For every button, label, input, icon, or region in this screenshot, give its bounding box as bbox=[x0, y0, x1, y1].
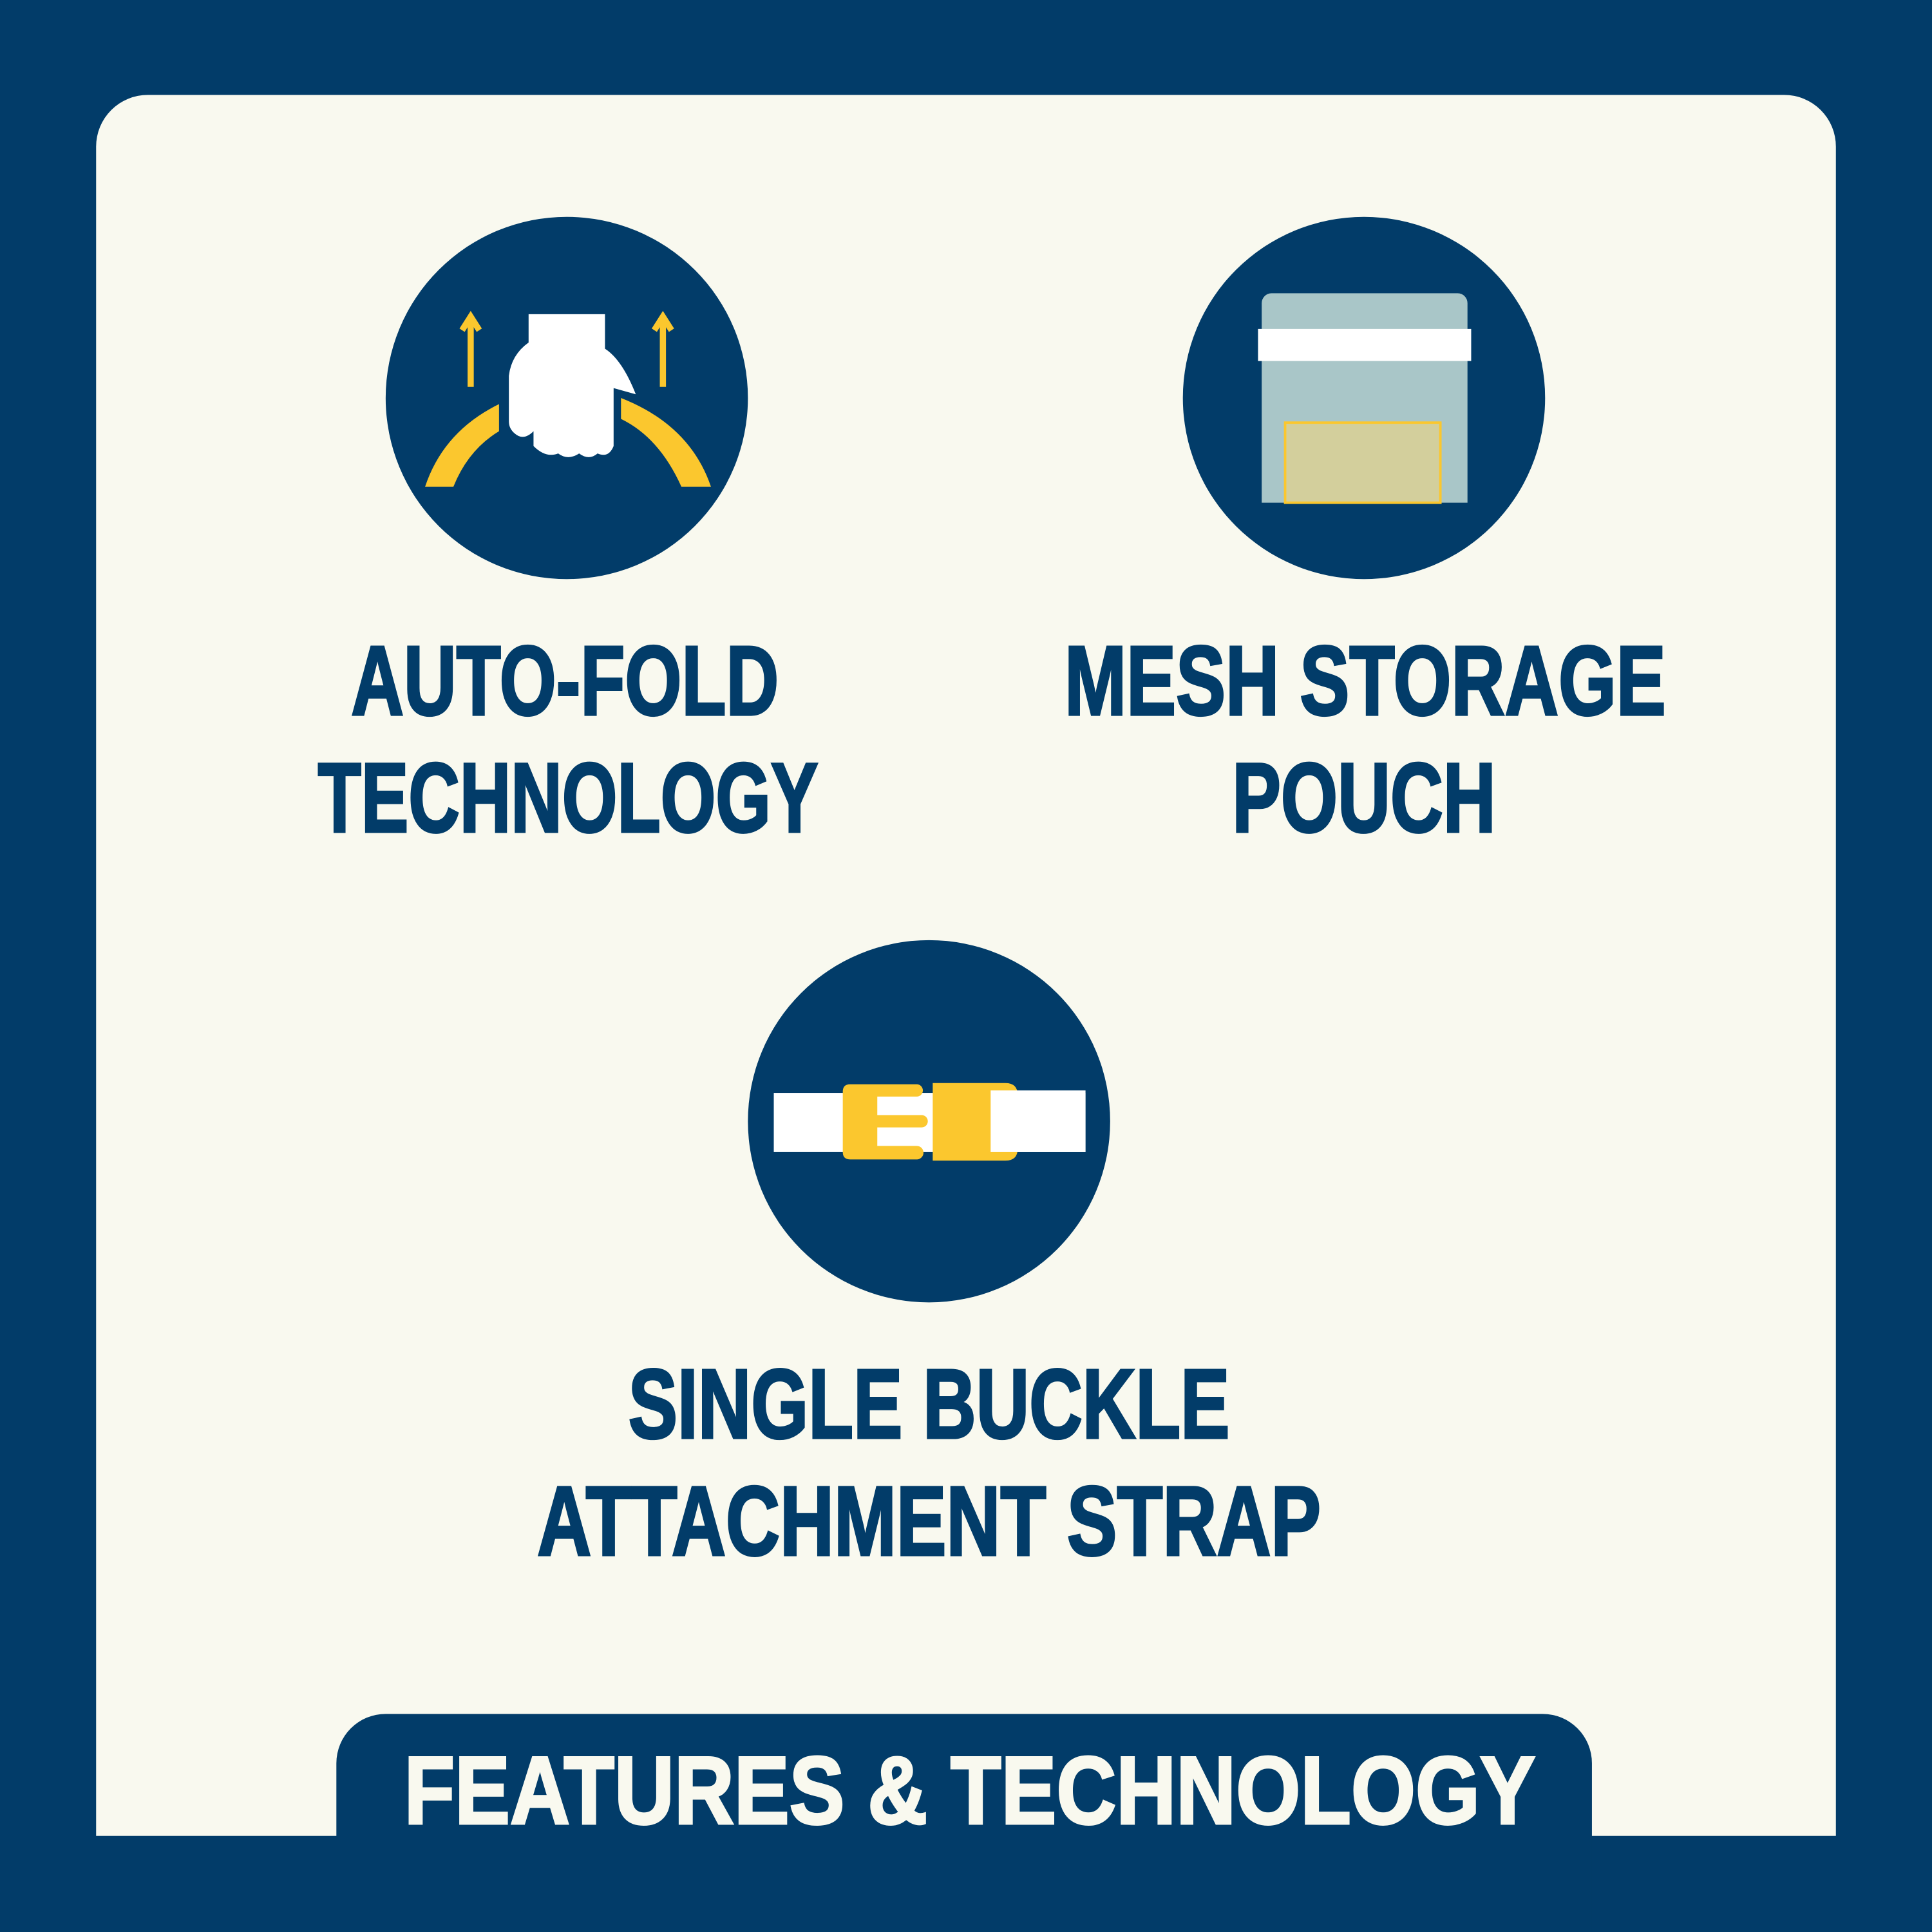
text: feature labels: AUTO-FOLD bbox=[351, 626, 779, 736]
text: feature labels bbox=[318, 626, 1666, 1577]
text: feature labels: ATTACHMENT STRAP bbox=[537, 1466, 1321, 1577]
mesh pocket bbox=[1285, 422, 1441, 503]
banner tab bbox=[336, 1714, 1592, 1932]
text: feature labels: MESH STORAGE bbox=[1065, 626, 1666, 736]
banner title: FEATURES & TECHNOLOGY bbox=[404, 1737, 1535, 1844]
icon: hand bbox=[509, 314, 636, 457]
icon: auto-fold bbox=[386, 217, 748, 579]
icon: mesh pouch bbox=[1183, 217, 1545, 579]
icon: yellow arcs bbox=[425, 404, 499, 487]
text: feature labels: TECHNOLOGY bbox=[318, 743, 818, 853]
icon: buckle bbox=[748, 940, 1110, 1302]
icon: up arrows bbox=[462, 317, 672, 387]
text: feature labels: POUCH bbox=[1232, 743, 1496, 853]
text: feature labels: SINGLE BUCKLE bbox=[629, 1349, 1229, 1459]
